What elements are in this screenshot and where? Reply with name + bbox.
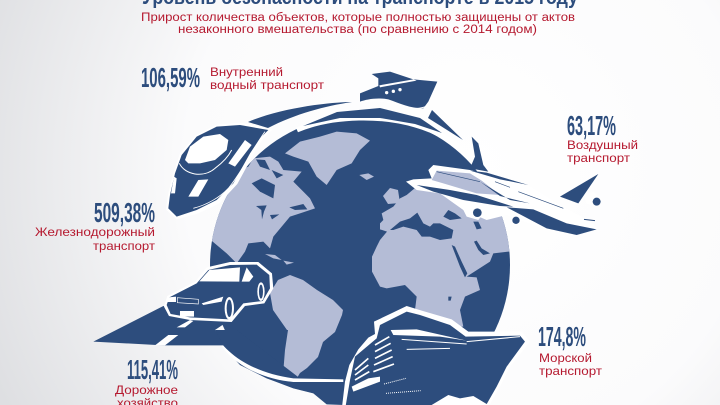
- label: air transport: Воздушный: [567, 138, 638, 152]
- label: rail transport: транспорт: [93, 239, 156, 253]
- label: sea transport: транспорт: [539, 364, 603, 378]
- subtitle: [141, 12, 575, 36]
- label: air transport: транспорт: [567, 151, 631, 165]
- globe: [207, 115, 520, 405]
- label: rail transport: 509,38%: [94, 197, 155, 228]
- seas: [390, 210, 490, 301]
- icon: car on road: [93, 262, 273, 345]
- text: 115,41%: [127, 354, 178, 385]
- label: inland water transport: 106,59%: [141, 62, 200, 93]
- icon: high-speed train: [166, 123, 273, 219]
- label: sea transport: 174,8%: [538, 321, 586, 352]
- Iceland: [359, 173, 374, 180]
- subtitle: незаконного вмешательства (по сравнению с 2014 годом): [178, 24, 537, 36]
- label: inland water transport: [141, 62, 325, 93]
- label: air transport: [567, 110, 638, 165]
- label: inland water transport: Внутренний: [210, 65, 283, 79]
- label: sea transport: [538, 321, 603, 378]
- icon: cruise ship: [342, 306, 530, 405]
- UK: [383, 188, 400, 204]
- label: rail transport: [35, 197, 156, 253]
- Hudson Bay and Great Lakes: [252, 159, 307, 219]
- label: road sector: Дорожное: [115, 383, 178, 397]
- label: road sector: [115, 354, 178, 405]
- Caribbean islands: [265, 254, 294, 265]
- icon: river yacht: [360, 72, 437, 108]
- Eurasia and Africa: [372, 187, 520, 327]
- label: rail transport: Железнодорожный: [35, 225, 155, 239]
- Greenland: [285, 132, 370, 185]
- North America: [207, 157, 315, 263]
- subtitle: Прирост количества объектов, которые полностью защищены от актов: [141, 12, 575, 24]
- South America: [270, 275, 343, 378]
- label: inland water transport: водный транспорт: [210, 78, 325, 92]
- icon: road swoosh: [213, 330, 343, 405]
- background below the globe: [200, 343, 343, 405]
- icon: airplane: [406, 137, 602, 235]
- swoosh: top arcs: [248, 102, 472, 160]
- label: air transport: 63,17%: [567, 110, 616, 141]
- label: sea transport: Морской: [539, 351, 592, 365]
